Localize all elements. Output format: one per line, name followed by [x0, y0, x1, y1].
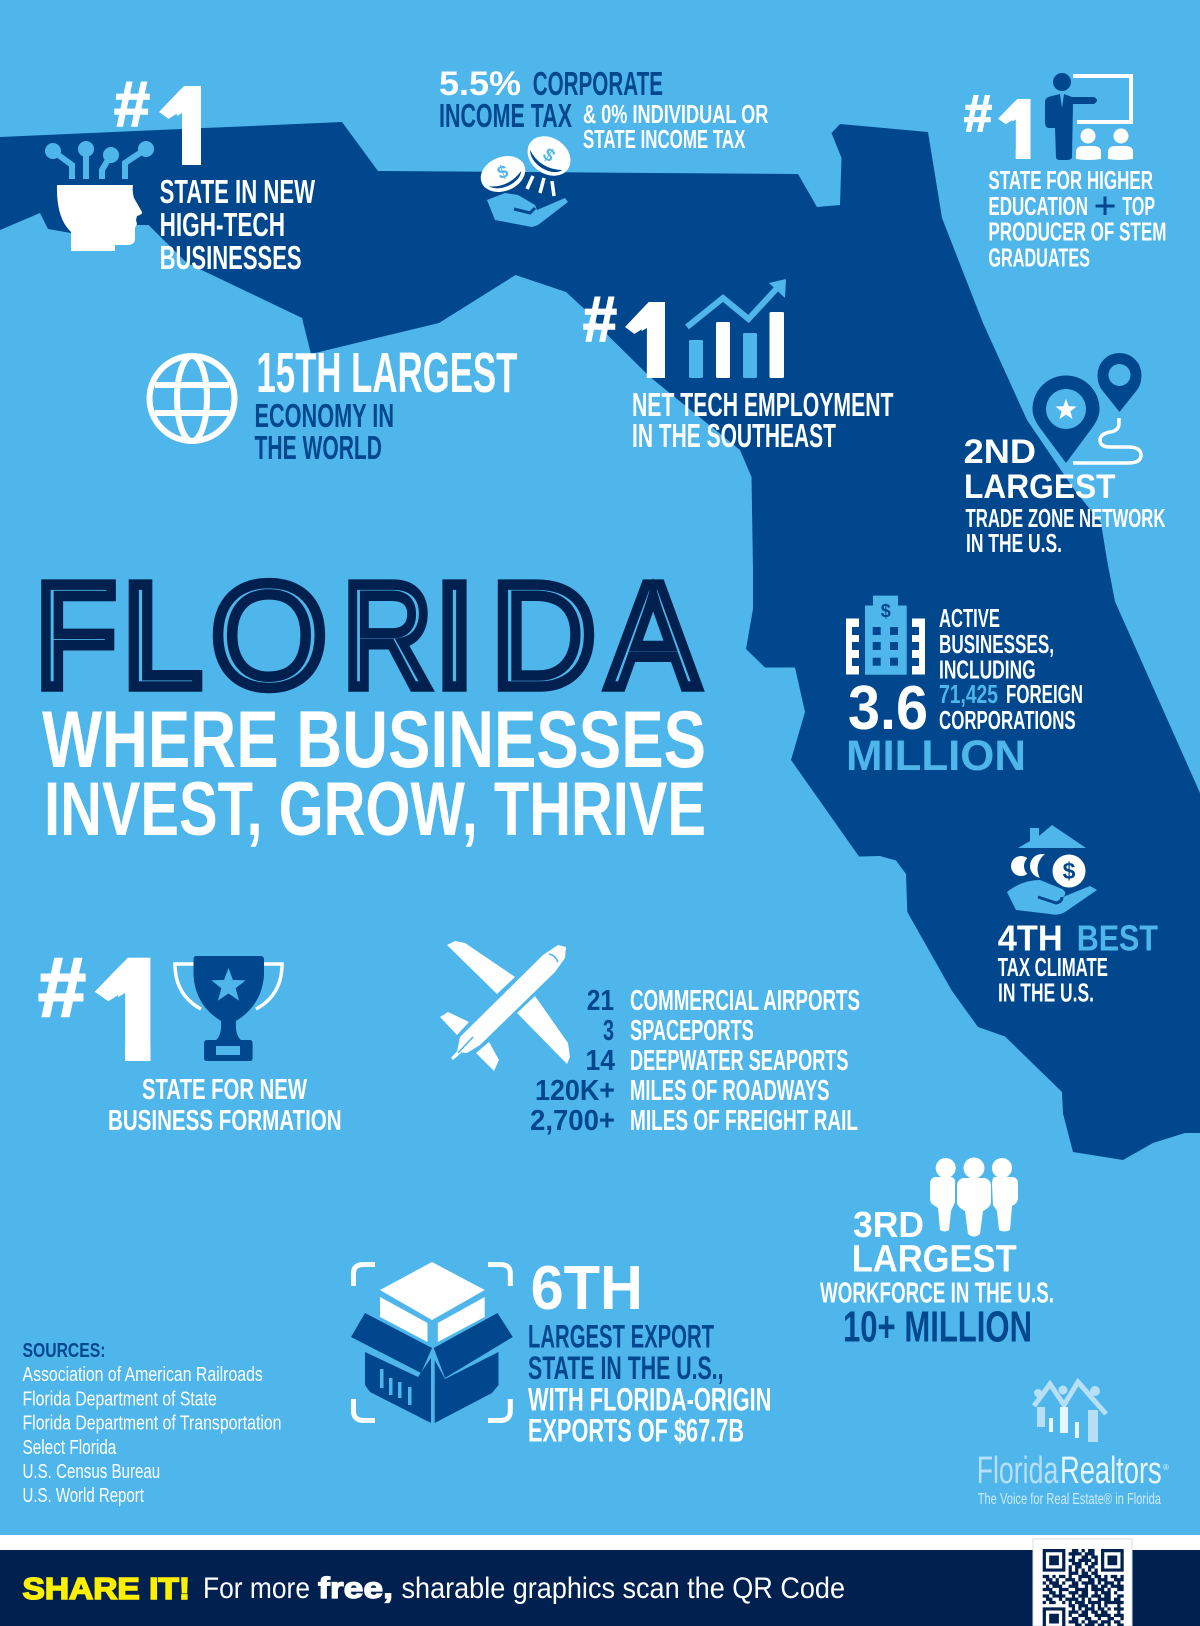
- caption: [108, 1074, 342, 1137]
- sources list: U.S. Census Bureau: [22, 1461, 160, 1483]
- rank number: #: [583, 283, 617, 355]
- icon: map pins with route: [1032, 353, 1142, 463]
- title: Florida: R: [342, 554, 432, 718]
- caption: [939, 603, 1083, 735]
- heading: 5.5%: [439, 65, 521, 103]
- list of figures: COMMERCIAL AIRPORTS: [630, 985, 860, 1017]
- heading: BEST: [1077, 918, 1158, 959]
- rank number: [964, 95, 1030, 159]
- rank number: [38, 958, 150, 1061]
- rank number: 1: [998, 81, 1046, 178]
- list of figures: 2,700+: [530, 1105, 615, 1137]
- heading: INCOME TAX: [439, 97, 572, 134]
- icon: rising bar chart: [687, 279, 786, 378]
- logo: Florida Realtors: [977, 1382, 1169, 1508]
- figure: MILLION: [846, 732, 1026, 780]
- list of figures: MILES OF ROADWAYS: [630, 1075, 830, 1107]
- heading: LARGEST: [964, 468, 1116, 506]
- sources list: U.S. World Report: [22, 1485, 144, 1507]
- heading: [964, 433, 1116, 506]
- sources list: [22, 1340, 282, 1507]
- call to action: free,: [318, 1572, 393, 1605]
- icon: house, coins and hand: [1007, 825, 1097, 915]
- caption: HIGH-TECH: [160, 206, 285, 243]
- call to action: For more: [203, 1572, 310, 1605]
- call to action: [22, 1571, 845, 1606]
- sources list: Select Florida: [22, 1437, 117, 1459]
- title: Florida: [35, 554, 698, 718]
- heading: 15TH LARGEST: [256, 341, 518, 405]
- title: Florida: F: [35, 554, 116, 718]
- caption: INCLUDING: [939, 655, 1036, 685]
- title: Florida: O: [211, 554, 327, 718]
- caption: THE WORLD: [254, 429, 382, 466]
- rank number: #: [38, 940, 86, 1034]
- caption: BUSINESSES: [160, 239, 302, 276]
- caption: [998, 952, 1108, 1008]
- heading: 3RD: [853, 1204, 924, 1245]
- caption: LARGEST EXPORT: [528, 1319, 714, 1355]
- caption: WORKFORCE IN THE U.S.: [820, 1278, 1054, 1310]
- figure: 3.6: [848, 674, 928, 743]
- icon: coins over hand: $: [539, 144, 559, 166]
- caption: NET TECH EMPLOYMENT: [632, 386, 894, 423]
- caption: IN THE SOUTHEAST: [632, 417, 836, 454]
- caption: 71,425: [939, 679, 998, 709]
- rank number: 1: [94, 925, 177, 1093]
- caption: STATE IN THE U.S.,: [528, 1350, 724, 1386]
- caption: [966, 503, 1166, 558]
- sources list: Association of American Railroads: [22, 1364, 263, 1386]
- caption: WITH FLORIDA-ORIGIN: [528, 1382, 771, 1418]
- caption: EXPORTS OF $67.7B: [528, 1413, 744, 1449]
- icon: open box: [351, 1262, 513, 1423]
- stat: #1 higher education: [964, 73, 1166, 273]
- caption: GRADUATES: [988, 243, 1090, 273]
- heading: [439, 65, 769, 154]
- icon: coins over hand: [475, 128, 578, 227]
- stat: 15th largest economy: [150, 341, 518, 466]
- sources list: Florida Department of State: [22, 1388, 217, 1410]
- heading: 6TH: [531, 1254, 643, 1323]
- title: Florida: D: [491, 554, 596, 718]
- caption: IN THE U.S.: [966, 528, 1062, 558]
- subtitle: WHERE BUSINESSES: [42, 695, 706, 785]
- rank number: [114, 82, 201, 165]
- stat: 3rd largest workforce: [820, 1158, 1054, 1352]
- subtitle: [42, 695, 706, 852]
- stat: corporate income tax: [439, 65, 769, 227]
- caption: BUSINESSES,: [939, 629, 1054, 659]
- stat: #1 high-tech businesses: [45, 82, 315, 270]
- heading: [998, 918, 1158, 959]
- caption: EDUCATION: [988, 191, 1088, 221]
- heading: 4TH: [998, 918, 1063, 959]
- heading: CORPORATE: [533, 65, 663, 102]
- icon: three people: [930, 1158, 1018, 1236]
- caption: [254, 397, 394, 466]
- icon: teacher and students: [1045, 73, 1133, 160]
- figure: 10+ MILLION: [843, 1303, 1032, 1352]
- caption: TOP: [1122, 191, 1155, 221]
- heading: & 0% INDIVIDUAL OR: [583, 99, 769, 129]
- heading: [852, 1204, 1017, 1281]
- icon: house with people: [1034, 1382, 1106, 1442]
- icon: office building: [846, 596, 925, 675]
- caption: ACTIVE: [939, 603, 1000, 633]
- title: Florida: I: [434, 554, 475, 718]
- list of figures: DEEPWATER SEAPORTS: [630, 1045, 848, 1077]
- list of figures: 14: [586, 1045, 615, 1077]
- caption: [528, 1319, 771, 1449]
- caption: [160, 173, 316, 276]
- wordmark: Realtors: [1060, 1450, 1162, 1492]
- stat: 2nd largest trade zone: [964, 353, 1166, 558]
- rank number: #: [114, 68, 150, 140]
- icon: head with circuits: [45, 141, 154, 251]
- icon: office building: $: [881, 601, 891, 621]
- stat: #1 new business formation: [38, 956, 340, 1130]
- list of figures: SPACEPORTS: [630, 1015, 754, 1047]
- wordmark: ®: [1163, 1463, 1169, 1472]
- wordmark: [977, 1450, 1169, 1508]
- heading: STATE INCOME TAX: [583, 124, 746, 154]
- stat: transportation infrastructure: [440, 941, 860, 1137]
- wordmark: Florida: [977, 1450, 1059, 1492]
- list of figures: 120K+: [535, 1075, 615, 1107]
- caption: CORPORATIONS: [939, 705, 1076, 735]
- icon: coins over hand: $: [495, 161, 511, 183]
- list of figures: [530, 985, 860, 1137]
- heading: LARGEST: [852, 1239, 1017, 1281]
- rank number: 1: [624, 279, 685, 402]
- caption: [632, 386, 894, 454]
- call to action: sharable graphics scan the QR Code: [402, 1572, 845, 1605]
- rank number: 1: [158, 62, 222, 190]
- sources list: SOURCES:: [22, 1340, 106, 1362]
- caption: STATE FOR NEW: [142, 1074, 307, 1106]
- list of figures: MILES OF FREIGHT RAIL: [630, 1105, 858, 1137]
- stat: #1 net tech employment: [583, 279, 894, 454]
- stat: 3.6 million businesses: [846, 596, 1083, 780]
- title: Florida: A: [608, 554, 698, 718]
- stat: 6th largest export state: [351, 1254, 771, 1449]
- caption: ECONOMY IN: [254, 397, 394, 434]
- figure: [846, 674, 1026, 780]
- caption: FOREIGN: [1006, 679, 1083, 709]
- rank number: [583, 296, 665, 378]
- map of Florida: [0, 122, 1200, 1160]
- subtitle: INVEST, GROW, THRIVE: [44, 767, 706, 852]
- caption: [988, 165, 1166, 273]
- heading: 2ND: [964, 433, 1036, 471]
- list of figures: 3: [603, 1015, 614, 1047]
- rank number: #: [964, 85, 992, 143]
- caption: IN THE U.S.: [998, 978, 1094, 1008]
- call to action: SHARE IT!: [22, 1571, 190, 1606]
- sources list: Florida Department of Transportation: [22, 1413, 282, 1435]
- caption: BUSINESS FORMATION: [108, 1105, 342, 1137]
- title: Florida: L: [122, 554, 202, 718]
- icon: house, coins and hand: $: [1063, 858, 1076, 884]
- list of figures: 21: [587, 985, 614, 1017]
- caption: TAX CLIMATE: [998, 952, 1108, 982]
- caption: STATE IN NEW: [160, 173, 316, 210]
- footer band: [0, 1535, 1200, 1626]
- stat: 4th best tax climate: [998, 825, 1158, 1008]
- icon: airplane: [440, 941, 570, 1071]
- QR code: [1033, 1539, 1132, 1626]
- icon: globe: [150, 356, 234, 441]
- icon: trophy: [175, 956, 282, 1061]
